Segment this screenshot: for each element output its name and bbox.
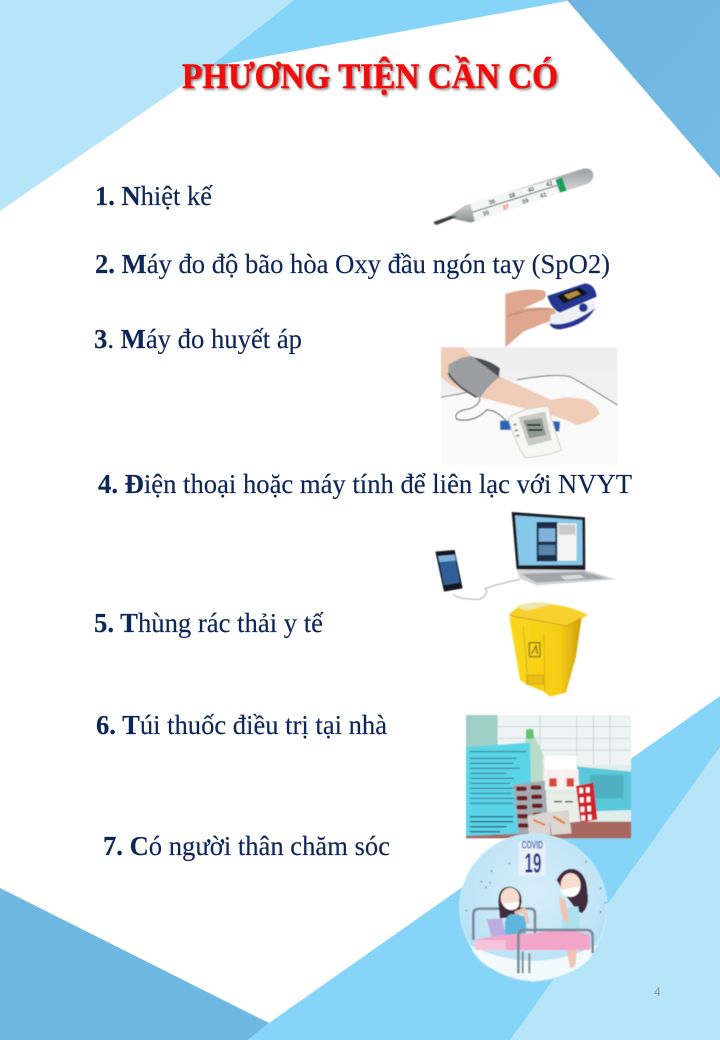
illustration: caregiver with covid patient — [460, 834, 607, 982]
item 2 text: 2. Máy đo độ bão hòa Oxy đầu ngón tay (SpO2) — [95, 249, 610, 279]
patient figure — [498, 887, 528, 940]
item 6 text: 6. Túi thuốc điều trị tại nhà — [96, 710, 387, 740]
title: PHƯƠNG TIỆN CẦN CÓ — [182, 56, 558, 96]
caregiver figure — [557, 869, 588, 968]
icon: thermometer: 42 — [545, 181, 554, 189]
illustration: caregiver with covid patient: 19 — [525, 848, 541, 879]
icon: thermometer: 39 — [521, 198, 530, 206]
icon: thermometer: 37 — [502, 204, 511, 212]
icon: thermometer: 40 — [527, 186, 536, 194]
page number: 4 — [654, 985, 661, 999]
icon: thermometer: 41 — [539, 192, 548, 200]
image: home medicine kit — [466, 715, 631, 838]
icon: thermometer: 36 — [488, 199, 497, 207]
blanket and foot rail — [475, 930, 590, 950]
item 5 text: 5. Thùng rác thải y tế — [94, 608, 324, 638]
icon: blood pressure monitor — [441, 347, 617, 465]
icon: pulse oximeter — [505, 283, 597, 347]
item 3 text: 3. Máy đo huyết áp — [94, 324, 302, 354]
item 7 text: 7. Có người thân chăm sóc — [103, 831, 390, 861]
icon: yellow waste bin — [509, 602, 588, 697]
item 4 text: 4. Điện thoại hoặc máy tính để liên lạc với NVYT — [98, 469, 632, 499]
icon: thermometer: 35 — [482, 210, 491, 218]
icon: phone and laptop — [435, 512, 616, 599]
illustration: caregiver with covid patient: COVID — [522, 840, 543, 852]
bed headboard — [473, 909, 535, 940]
icon: thermometer — [433, 168, 593, 225]
icon: thermometer: 38 — [508, 192, 517, 200]
item 1 text: 1. Nhiệt kế — [95, 181, 213, 211]
